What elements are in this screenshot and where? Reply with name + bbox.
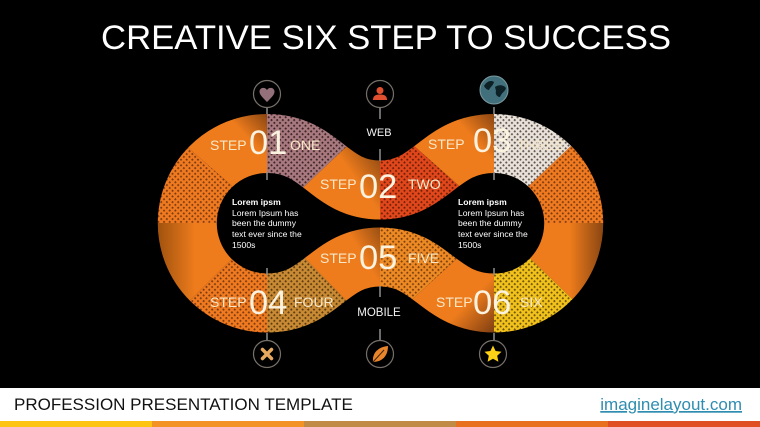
- mobile label: MOBILE: [357, 307, 401, 319]
- step 03 label: STEP: [428, 136, 465, 152]
- segment: step 05 solid: [304, 228, 380, 300]
- step 04 label: FOUR: [294, 294, 334, 310]
- step 01 label: 01: [249, 124, 287, 162]
- segment: lower right solid: [514, 223, 620, 345]
- step 06 label: [436, 284, 543, 322]
- icon: heart: [254, 80, 280, 108]
- segment: step 02 solid: [303, 146, 380, 220]
- step 01 label: [210, 124, 320, 162]
- right text block: been the dummy: [458, 218, 523, 228]
- segment: lower left solid: [158, 223, 232, 300]
- footer colour stripes: [0, 421, 760, 427]
- footer title: PROFESSION PRESENTATION TEMPLATE: [14, 395, 353, 414]
- step 06 label: SIX: [520, 294, 543, 310]
- step 05 label: [320, 239, 439, 277]
- right text block: text ever since the: [458, 229, 528, 239]
- segment: step 02 red pattern: [380, 146, 460, 220]
- icon: person: [366, 80, 394, 108]
- right text block: Lorem ipsm: [458, 197, 507, 207]
- right text block: Lorem Ipsum has: [458, 208, 524, 218]
- step 03 label: THREE: [517, 137, 564, 153]
- icon: globe: [480, 76, 508, 104]
- segment: step 01 mauve pattern: [267, 114, 346, 188]
- segment: step 03 solid: [414, 114, 494, 186]
- left text block: text ever since the: [232, 229, 302, 239]
- step 02 label: 02: [359, 168, 397, 206]
- step 02 label: STEP: [320, 176, 357, 192]
- step 05 label: FIVE: [408, 250, 439, 266]
- left text block: 1500s: [232, 240, 255, 250]
- footer link: imaginelayout.com: [600, 395, 742, 414]
- segment: step 05 pattern: [380, 228, 456, 300]
- segment: step 06 solid: [412, 258, 494, 332]
- segment: step 03 white pattern: [494, 114, 571, 186]
- right text block: [458, 197, 528, 250]
- left text block: Lorem Ipsum has: [232, 208, 298, 218]
- step 03 label: 03: [473, 122, 511, 160]
- left text block: [232, 197, 302, 250]
- icon: cross: [254, 340, 280, 368]
- step 03 label: [428, 122, 564, 160]
- step 04 label: 04: [249, 284, 287, 322]
- left text block: Lorem ipsm: [232, 197, 281, 207]
- icon: star: [480, 340, 506, 368]
- step 05 label: 05: [359, 239, 397, 277]
- web label: WEB: [366, 127, 392, 139]
- segment: upper left pattern: [158, 148, 233, 223]
- infinity band with six step segments: [158, 114, 604, 332]
- step 01 label: ONE: [290, 137, 320, 153]
- step 01 label: STEP: [210, 137, 247, 153]
- step 02 label: TWO: [408, 176, 441, 192]
- right text block: 1500s: [458, 240, 481, 250]
- footer bar: [0, 388, 760, 427]
- step 05 label: STEP: [320, 250, 357, 266]
- segment: step 06 yellow pattern: [494, 258, 572, 332]
- icon: leaf: [366, 340, 394, 368]
- segment: upper right pattern: [528, 146, 604, 223]
- segment: step 01 solid: [188, 114, 267, 187]
- segment: step 04 brown pattern: [267, 258, 346, 332]
- connector lines: [267, 107, 494, 341]
- step 06 label: 06: [473, 284, 511, 322]
- left text block: been the dummy: [232, 218, 297, 228]
- step 02 label: [320, 168, 441, 206]
- step 04 label: [210, 284, 334, 322]
- segment: step 04 orange pattern: [190, 259, 267, 332]
- title: CREATIVE SIX STEP TO SUCCESS: [101, 19, 671, 57]
- step 04 label: STEP: [210, 294, 247, 310]
- step 06 label: STEP: [436, 294, 473, 310]
